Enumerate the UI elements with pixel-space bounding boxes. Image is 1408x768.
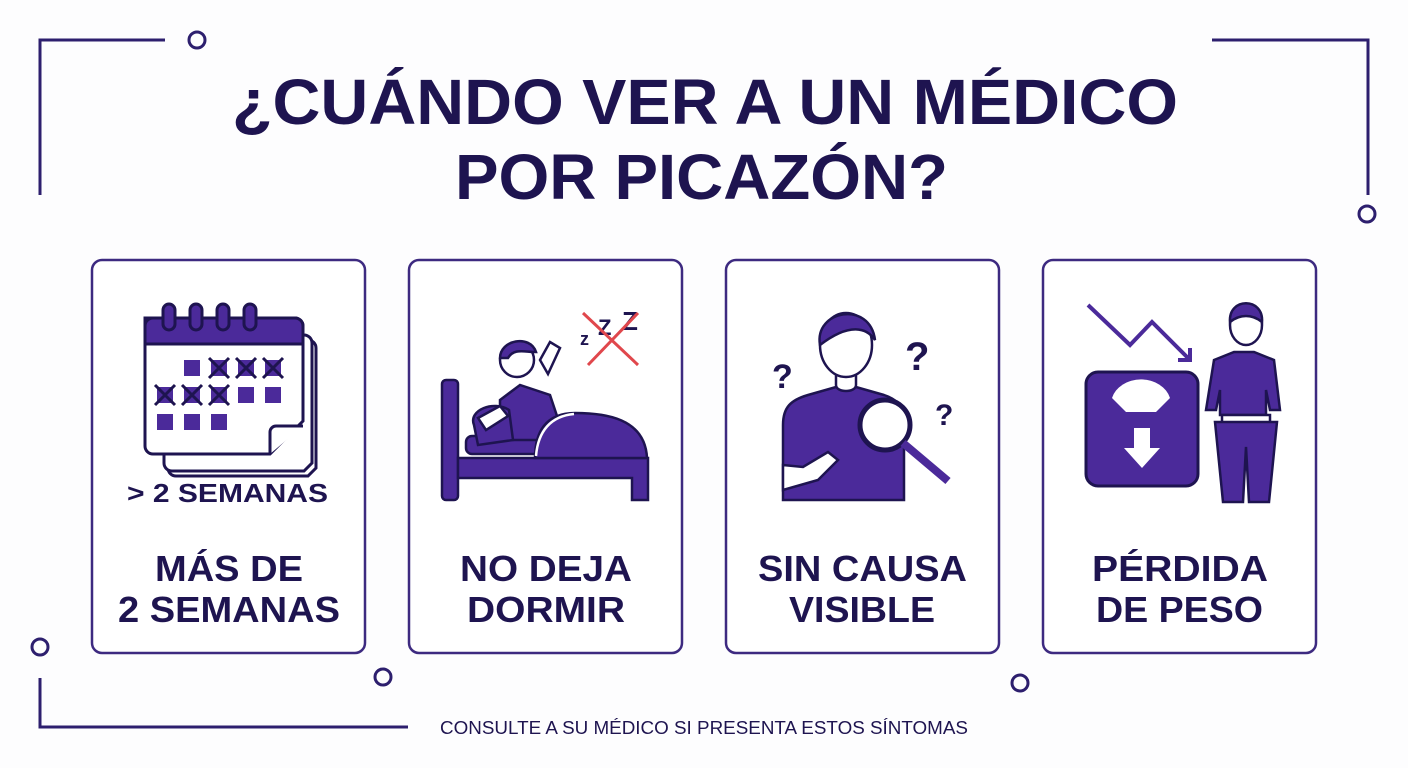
title: ¿CUÁNDO VER A UN MÉDICO	[232, 66, 1178, 138]
panel: sin causa visible	[726, 260, 999, 653]
panel: más de 2 semanas: > 2 SEMANAS	[127, 478, 328, 508]
panel: pérdida de peso: PÉRDIDA	[1092, 548, 1268, 589]
panel: pérdida de peso: DE PESO	[1096, 589, 1263, 630]
icon: calendar	[145, 304, 316, 476]
icon: zzz crossed: z	[580, 329, 589, 349]
title: POR PICAZÓN?	[455, 141, 948, 213]
panel: más de 2 semanas: 2 SEMANAS	[118, 589, 340, 630]
panel: sin causa visible: VISIBLE	[789, 589, 935, 630]
panel: sin causa visible: ?	[935, 399, 953, 432]
panel: sin causa visible: ?	[905, 335, 929, 379]
title	[232, 66, 1178, 213]
panel: más de 2 semanas	[92, 260, 365, 653]
panel: sin causa visible: SIN CAUSA	[758, 548, 967, 589]
icon: zzz crossed	[580, 306, 638, 365]
panel: más de 2 semanas: MÁS DE	[155, 548, 303, 589]
footer note: CONSULTE A SU MÉDICO SI PRESENTA ESTOS SÍNTOMAS	[440, 718, 968, 738]
panel: sin causa visible: ?	[772, 358, 793, 396]
icon: scale	[1086, 372, 1198, 486]
panel: no deja dormir	[409, 260, 682, 653]
icon: bed with sleepless person	[442, 341, 648, 500]
icon: down-trend arrow	[1088, 305, 1190, 360]
icon: person with magnifier	[783, 313, 948, 500]
icon: person in loose pants	[1206, 303, 1280, 502]
icon: zzz crossed: Z	[598, 315, 611, 340]
panel: no deja dormir: DORMIR	[467, 589, 625, 630]
panel: no deja dormir: NO DEJA	[460, 548, 632, 589]
icon: zzz crossed: Z	[622, 306, 638, 336]
panel: pérdida de peso	[1043, 260, 1316, 653]
